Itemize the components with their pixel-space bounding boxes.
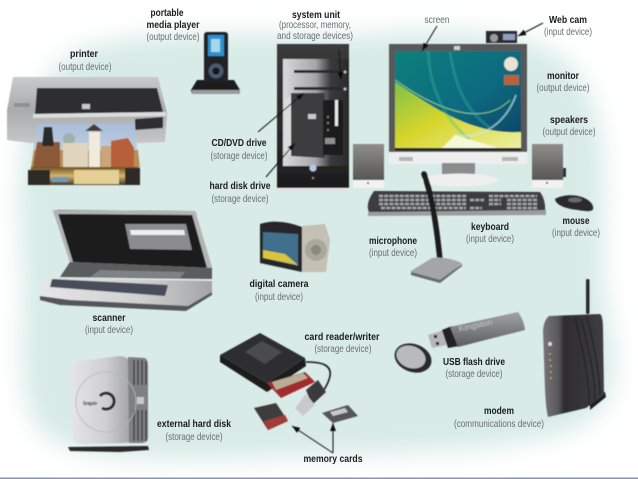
label: web cam: [544, 14, 592, 38]
label: scanner: (input device): [85, 324, 133, 336]
USB flash drive: Kingston: [458, 318, 493, 333]
label: external hard disk: [157, 418, 231, 443]
label: modem: modem: [484, 405, 514, 417]
inserted memory card: [267, 372, 315, 398]
label: mouse: mouse: [562, 215, 590, 227]
label: portable media player: portable: [150, 7, 184, 19]
label: digital camera: digital camera: [250, 278, 309, 290]
right speaker: [532, 144, 566, 188]
label: scanner: [85, 312, 133, 336]
mouse: [555, 195, 593, 211]
card reader/writer: [220, 333, 330, 416]
coin: [390, 338, 436, 378]
label: USB flash drive: (storage device): [446, 368, 502, 380]
label: keyboard: [466, 221, 514, 245]
external hard disk: [68, 356, 149, 452]
label: portable media player: media player: [146, 19, 200, 31]
monitor: [389, 44, 527, 186]
label: digital camera: (input device): [255, 291, 303, 303]
label: system unit: [277, 9, 353, 42]
label: speakers: (output device): [542, 126, 596, 138]
label: digital camera: [250, 278, 309, 303]
label: external hard disk: (storage device): [166, 431, 222, 443]
label: screen: screen: [424, 14, 450, 26]
label: system unit: (processor, memory,: [279, 19, 351, 31]
portable media player: [191, 32, 240, 94]
label: hard disk drive: hard disk drive: [210, 180, 271, 192]
label: external hard disk: external hard disk: [157, 418, 231, 430]
label: hard disk drive: (storage device): [212, 193, 268, 205]
label: keyboard: (input device): [466, 233, 514, 245]
label: speakers: speakers: [550, 114, 588, 126]
label: portable media player: [146, 7, 200, 43]
label: microphone: [369, 235, 417, 259]
label: mouse: [552, 215, 600, 239]
label: CD/DVD drive: (storage device): [210, 150, 268, 162]
arrows: memory cards: [292, 423, 333, 453]
label: speakers: [542, 114, 596, 138]
printer: [7, 77, 167, 185]
label: hard disk drive: [210, 180, 271, 205]
label: web cam: (input device): [544, 26, 592, 38]
system unit: [277, 44, 349, 192]
label: CD/DVD drive: CD/DVD drive: [212, 137, 267, 149]
label: printer: (output device): [58, 61, 112, 73]
label: printer: printer: [70, 48, 98, 60]
label: scanner: scanner: [92, 312, 126, 324]
arrows: screen and web cam: [422, 23, 543, 51]
keyboard: [368, 191, 546, 216]
label: microphone: microphone: [369, 235, 417, 247]
printed photo: [28, 124, 140, 185]
bottom strip: [0, 478, 638, 479]
label: portable media player: (output device): [146, 31, 200, 43]
screen wallpaper: [395, 51, 521, 150]
label: USB flash drive: USB flash drive: [443, 356, 505, 368]
label: microphone: (input device): [369, 247, 417, 259]
label: modem: (communications device): [454, 418, 544, 430]
label: web cam: Web cam: [549, 14, 587, 26]
modem: [543, 279, 606, 417]
cable and USB plug: [295, 362, 330, 416]
label: monitor: monitor: [547, 70, 579, 82]
label: keyboard: keyboard: [471, 221, 509, 233]
label: monitor: [536, 70, 590, 94]
label: card reader/writer: card reader/writer: [304, 331, 380, 343]
label: printer: [58, 48, 112, 73]
arrows: system unit: [258, 50, 341, 177]
USB flash drive: [428, 312, 525, 348]
label: card reader/writer: [304, 331, 380, 355]
label: USB flash drive: [443, 356, 505, 380]
web cam: [486, 31, 517, 43]
label: CD/DVD drive: [210, 137, 268, 162]
microphone: [411, 174, 462, 283]
label: memory cards: memory cards: [304, 453, 363, 465]
label: card reader/writer: (storage device): [314, 343, 372, 355]
label: mouse: (input device): [552, 227, 600, 239]
external hard disk: Seagate: [83, 401, 97, 407]
label: system unit: system unit: [292, 9, 340, 21]
digital camera: [260, 222, 330, 272]
label: system unit: and storage devices): [277, 30, 353, 42]
label: monitor: (output device): [536, 82, 590, 94]
scanner: [40, 210, 212, 311]
memory cards: [254, 403, 358, 430]
left speaker: [353, 144, 384, 188]
label: modem: [454, 405, 544, 430]
